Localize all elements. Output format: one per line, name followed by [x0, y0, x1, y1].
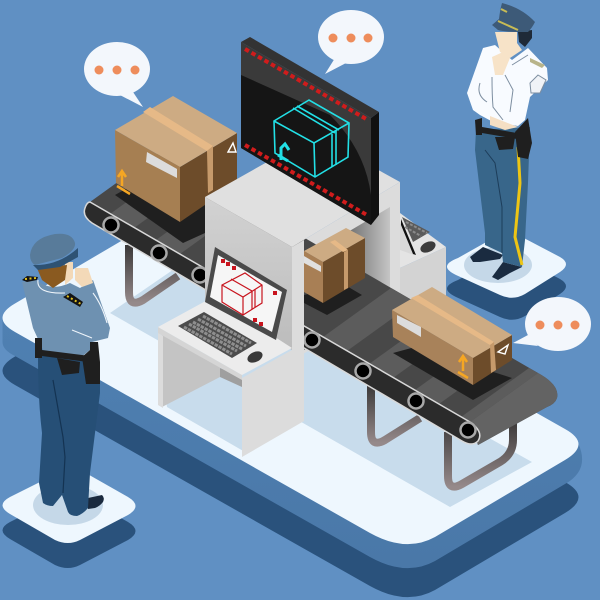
rear keyboard desk — [400, 213, 446, 325]
right officer cap — [492, 3, 535, 32]
right officer belt and holster — [475, 118, 532, 159]
left officer head — [37, 262, 93, 288]
cyan parcel outline — [274, 100, 349, 177]
right officer shirt — [467, 45, 548, 126]
red indicator squares — [221, 259, 277, 326]
front parcel — [392, 287, 512, 385]
left officer epaulettes — [22, 276, 83, 307]
keyboard — [178, 312, 257, 358]
red parcel outline — [222, 273, 262, 315]
left officer shirt — [22, 280, 110, 358]
left officer belt and holster — [35, 338, 100, 384]
monitor red indicator rows — [245, 49, 368, 215]
scanner body — [205, 135, 400, 428]
scanner rear face with tunnel — [292, 182, 400, 360]
conveyor legs — [129, 245, 513, 487]
main platform — [2, 216, 582, 597]
left officer (rear view) — [22, 234, 110, 516]
conveyor belt — [84, 153, 557, 445]
conveyor rollers — [104, 218, 476, 438]
mouse — [246, 349, 264, 365]
monitor — [241, 37, 379, 225]
speech bubble: centre — [318, 10, 384, 74]
left officer trousers — [38, 355, 100, 516]
right officer shoes — [470, 247, 503, 262]
speech bubble: right — [513, 297, 591, 351]
left officer platform — [2, 469, 136, 568]
left officer cap — [30, 234, 78, 270]
large parcel — [115, 96, 237, 222]
right officer (front view) — [467, 3, 548, 280]
middle parcel in tunnel — [304, 228, 365, 303]
right officer trousers — [475, 127, 530, 267]
speech bubble: left — [84, 42, 150, 107]
left officer shoe — [88, 495, 104, 509]
right officer platform — [447, 233, 566, 320]
laptop — [205, 247, 287, 340]
right officer head — [492, 30, 532, 75]
front desk — [158, 297, 292, 457]
